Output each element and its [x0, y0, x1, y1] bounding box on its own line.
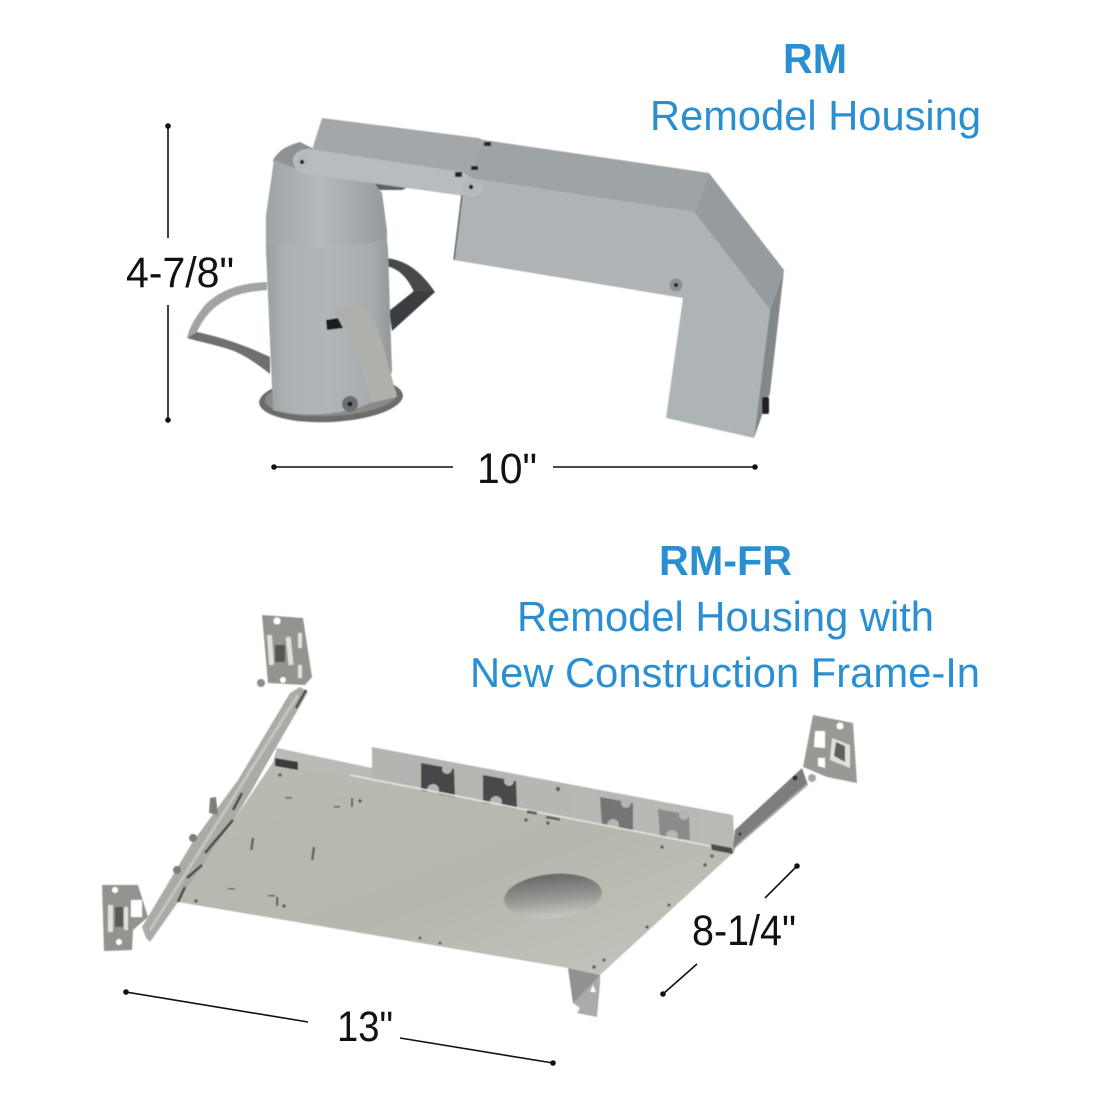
dimension: 10" width	[271, 445, 758, 493]
angled top	[694, 173, 784, 310]
back wall	[372, 747, 735, 852]
bottom bracket	[568, 968, 600, 1017]
right rail	[733, 768, 808, 849]
title: RM	[650, 35, 981, 139]
knockout windows	[421, 763, 690, 842]
dimension: 8-1/4" depth	[660, 863, 800, 997]
dimension: 13" length: 13"	[337, 1003, 393, 1051]
front screw	[670, 278, 682, 292]
back wall left	[273, 748, 372, 782]
dimension: 13" length	[123, 989, 556, 1066]
rear strap left, lower ribbon	[187, 332, 270, 374]
plate top highlight	[350, 775, 710, 846]
dome rear rim	[273, 142, 316, 175]
joint tabs	[484, 142, 491, 146]
arm screw left	[295, 155, 309, 169]
plate slots and dots	[194, 758, 714, 969]
rear strap right, upper ribbon	[386, 258, 435, 292]
cylinder dome	[266, 160, 387, 246]
flange screw	[342, 396, 358, 412]
left rail	[142, 687, 308, 942]
cylinder body	[266, 240, 392, 414]
title: RM-FR	[470, 537, 980, 696]
side face	[754, 270, 784, 438]
front strap	[333, 303, 397, 403]
heading: RM-FR: RM-FR	[659, 537, 792, 584]
switch	[762, 397, 769, 414]
flange	[258, 372, 404, 426]
right rail lower band	[733, 783, 808, 850]
dimension: 4-7/8" height: 4-7/8"	[126, 249, 234, 297]
right bracket	[803, 715, 857, 783]
rail rivets	[738, 776, 798, 836]
subheading line 1: Remodel Housing with	[517, 593, 934, 640]
rear strap right, lower ribbon	[389, 291, 435, 331]
top plate, right	[468, 140, 709, 212]
subheading line 2: New Construction Frame-In	[470, 649, 980, 696]
bottom-left bracket	[102, 885, 148, 951]
heading: RM: RM	[783, 35, 847, 82]
cooling fins	[370, 178, 410, 190]
wall rivet	[556, 787, 560, 791]
dimension: 8-1/4" depth: 8-1/4"	[692, 907, 796, 955]
product photo: RM remodel housing	[187, 118, 784, 438]
main plate	[178, 762, 735, 975]
dimension: 10" width: 10"	[477, 445, 537, 493]
flange inner	[264, 375, 398, 419]
top plate, left	[312, 118, 484, 178]
arm screw right	[463, 179, 479, 195]
rail highlight	[150, 695, 298, 930]
rail clip	[209, 797, 218, 815]
arm strip	[293, 149, 483, 197]
product photo: RM-FR frame-in	[102, 615, 857, 1017]
rail bumps	[173, 834, 197, 874]
front panel left edge	[454, 195, 462, 260]
top-left bracket	[257, 615, 312, 687]
dimension: 4-7/8" height	[126, 123, 234, 423]
corner latch	[711, 844, 733, 854]
front face	[454, 178, 770, 438]
rail slots	[178, 690, 306, 902]
rear strap left, upper ribbon	[187, 282, 267, 338]
slot	[326, 318, 343, 330]
subheading: Remodel Housing: Remodel Housing	[650, 92, 981, 139]
recessed hole	[502, 870, 604, 922]
